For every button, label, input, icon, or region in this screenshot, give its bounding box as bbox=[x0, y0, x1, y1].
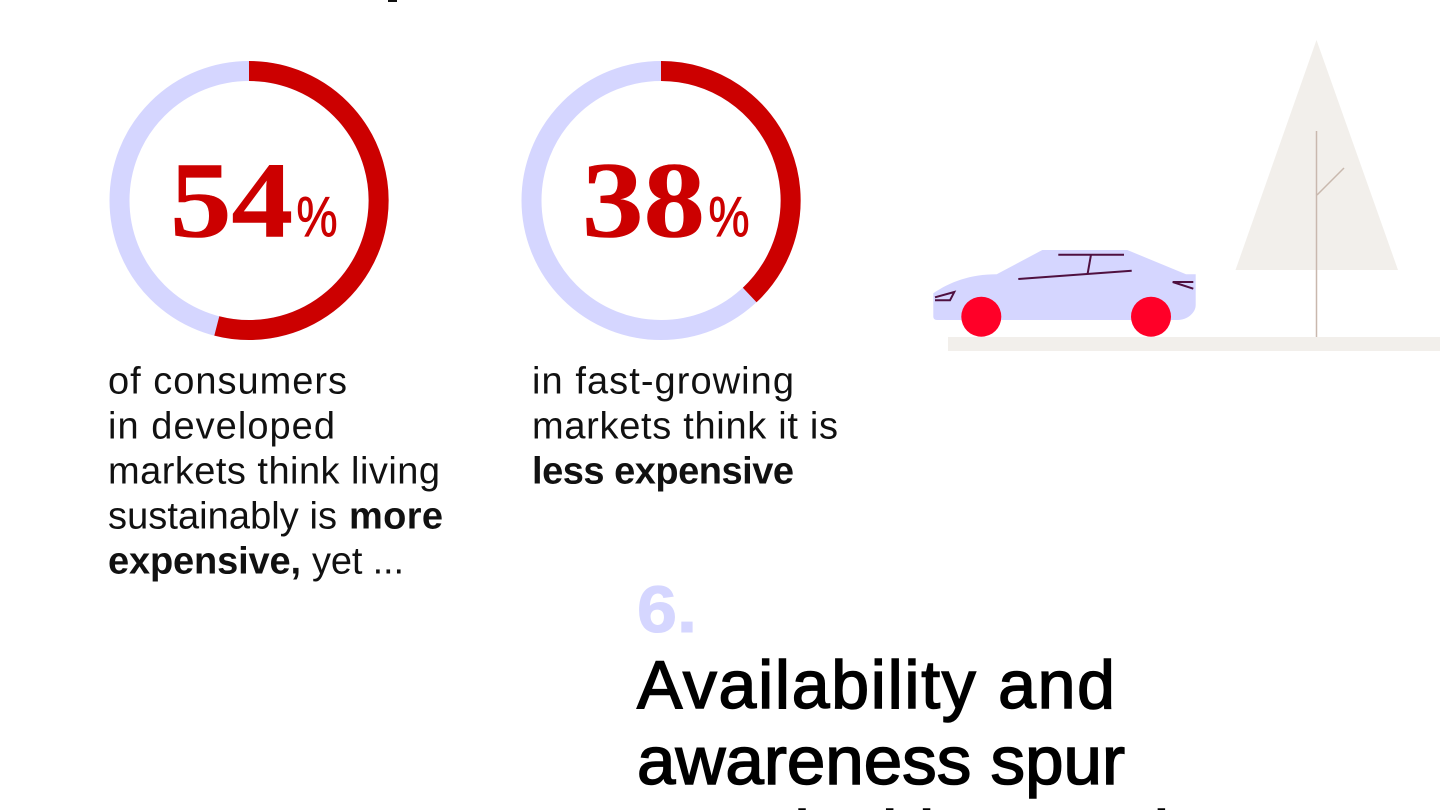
icon: tree bbox=[1236, 40, 1398, 337]
panel: section 6 heading bbox=[637, 572, 1169, 810]
illustration: car and tree on road bbox=[933, 40, 1440, 351]
text: developed markets caption: of consumers bbox=[108, 360, 347, 402]
text: fast-growing markets caption bbox=[532, 360, 838, 492]
heading: Availability and bbox=[637, 647, 1115, 723]
donut chart: 38%: % bbox=[708, 184, 750, 248]
text: developed markets caption bbox=[108, 360, 443, 582]
text: fast-growing markets caption: less expensive bbox=[532, 450, 794, 492]
panel: 54% developed markets stat bbox=[108, 71, 443, 582]
donut chart: 54% bbox=[120, 71, 379, 330]
text: fast-growing markets caption: in fast-growing bbox=[532, 360, 794, 402]
ground strip bbox=[948, 337, 1440, 351]
text: developed markets caption: expensive, bbox=[108, 540, 301, 582]
heading bbox=[637, 647, 1169, 810]
text: developed markets caption: in developed bbox=[108, 406, 335, 448]
section number: 6. bbox=[637, 572, 697, 646]
donut chart: 38% bbox=[532, 71, 791, 330]
heading: awareness spur bbox=[637, 723, 1125, 799]
text: developed markets caption: yet ... bbox=[312, 540, 404, 582]
text: developed markets caption: more bbox=[349, 496, 443, 538]
donut chart: 54%: % bbox=[296, 184, 338, 248]
icon: car bbox=[933, 250, 1196, 337]
donut chart: 54%: 54 bbox=[170, 141, 293, 261]
text: fast-growing markets caption: markets think it is bbox=[532, 406, 838, 448]
panel: 38% fast-growing markets stat bbox=[532, 71, 838, 492]
donut chart: 38%: 38 bbox=[582, 141, 705, 261]
text: developed markets caption: sustainably is bbox=[108, 496, 337, 538]
text: developed markets caption: markets think living bbox=[108, 450, 440, 492]
